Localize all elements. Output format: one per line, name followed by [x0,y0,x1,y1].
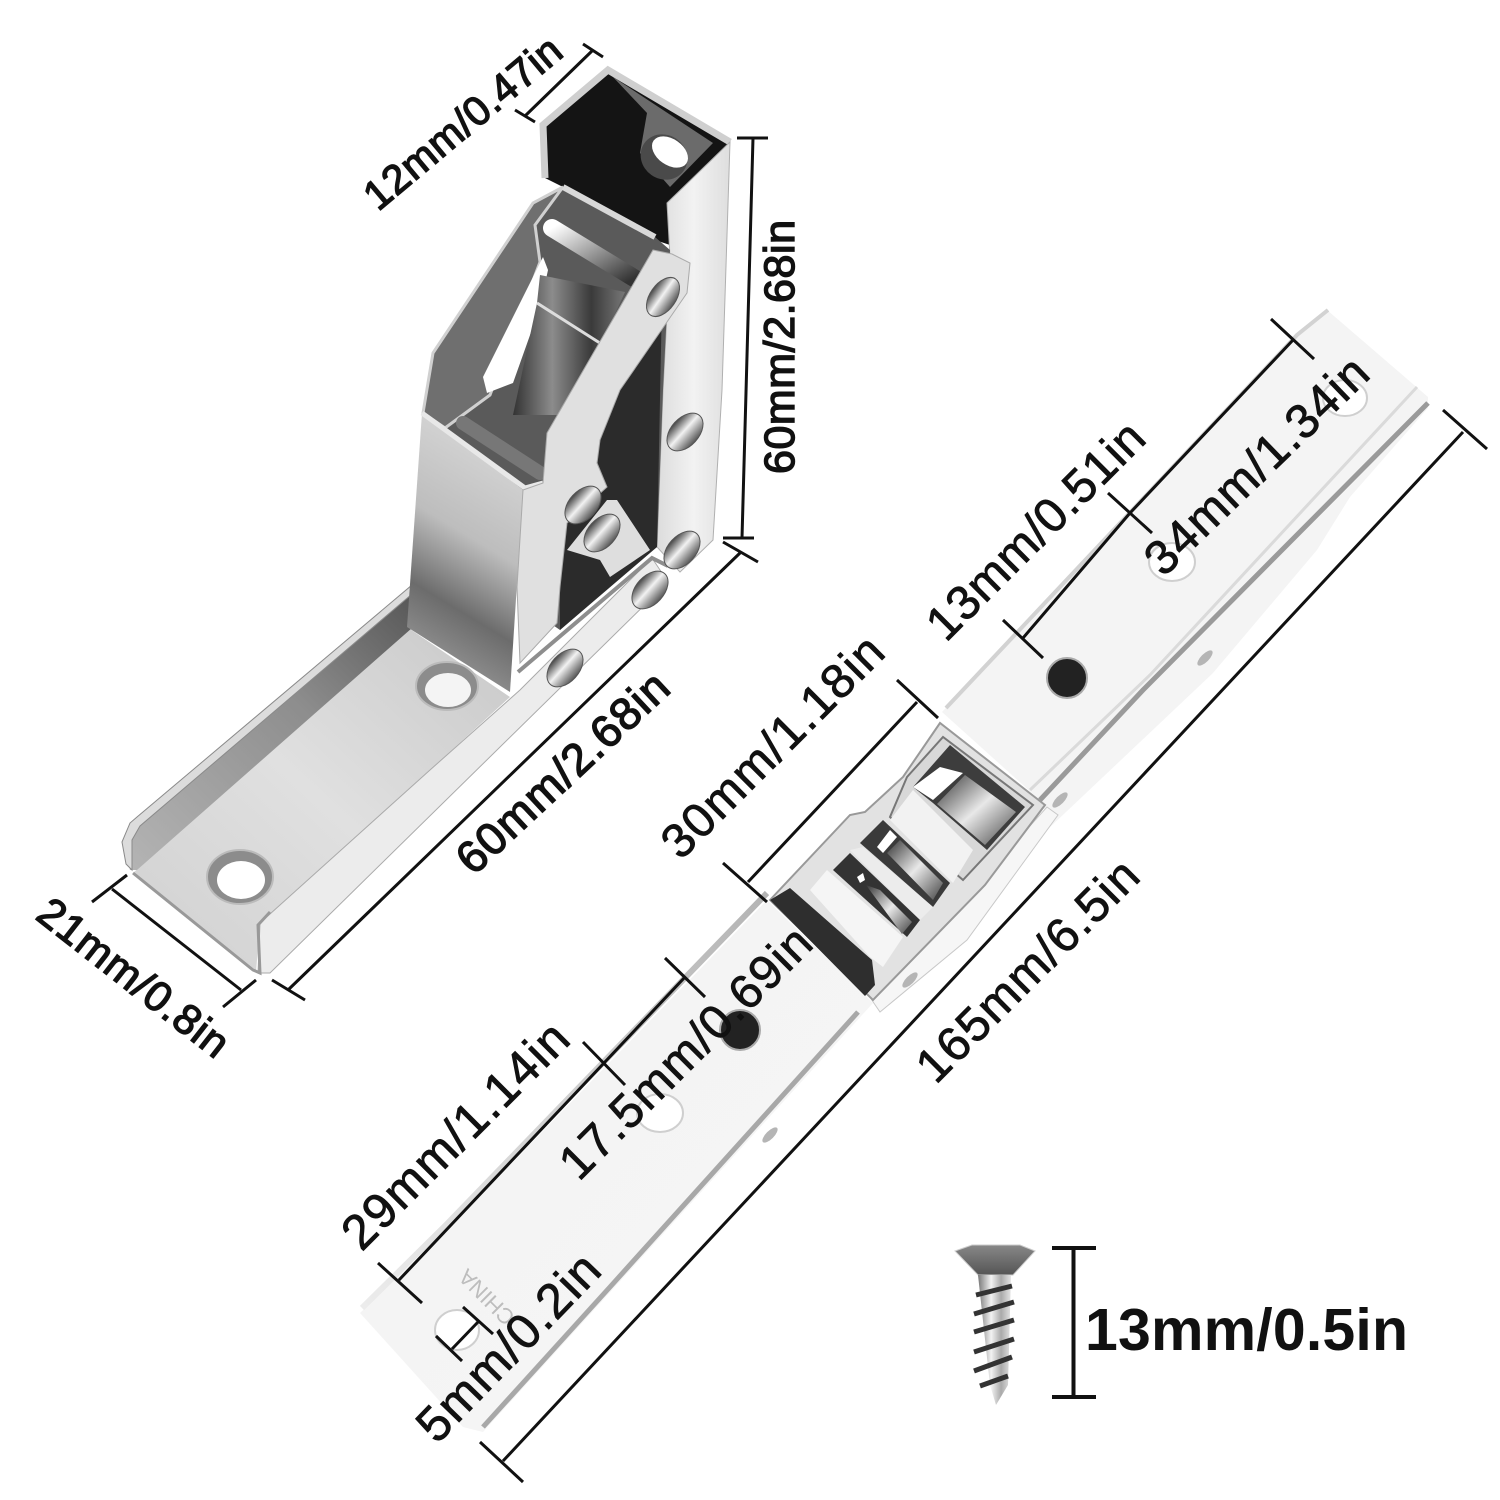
upper plate [942,310,1428,830]
middle window opening [877,830,897,853]
dimension: 60mm/2.68in vertical: 60mm/2.68in [756,220,804,474]
rivets [540,272,710,694]
dimension: 165mm/6.5in: 165mm/6.5in [906,849,1150,1093]
centre base [770,723,1045,1000]
dimension: 60mm/2.68in diagonal [272,542,758,1000]
lower dark channel [770,888,875,996]
dimension: 12mm/0.47in: 12mm/0.47in [354,27,571,219]
upper window opening [913,767,963,800]
white mounting holes [435,380,1367,1350]
lower roller [866,885,912,934]
gas strut cylinder [513,275,625,415]
countersunk black holes [720,658,1087,1050]
base end edge [133,873,270,973]
centre mechanism [770,723,1045,1000]
upright right panel [657,142,730,572]
dimension: 60mm/2.68in vertical [723,138,804,538]
mechanism interior [422,187,670,630]
centre light plate [890,790,973,883]
side flange [867,807,1058,1012]
lower light plate [810,870,903,967]
upper frame [890,737,1033,880]
lower pin [463,423,540,473]
dimension: 13mm/0.51in: 13mm/0.51in [916,411,1156,651]
straight hinge photo [360,310,1428,1432]
front rim [422,413,543,488]
screw head [955,1245,1035,1275]
dimension: 29mm/1.14in: 29mm/1.14in [331,1011,580,1260]
upper plate fold inner [1030,387,1417,790]
window arm [423,187,563,428]
dimension: 13mm/0.5in screw [1052,1248,1408,1397]
dimension: 60mm/2.68in diagonal: 60mm/2.68in [445,661,679,884]
upper plate top edge [946,310,1328,708]
link plate [567,500,650,577]
upper window [913,745,1025,850]
stamped CHINA mark: CHINA [453,1264,520,1330]
screw shank [978,1275,1011,1405]
window rim [563,187,655,237]
upper plate fold [1040,403,1428,800]
lower plate [360,900,873,1432]
upper bracket interior [543,68,730,245]
lower plate fold [483,1012,858,1427]
upper roller [937,775,1016,845]
lower window [833,853,920,937]
rear mounting hole [416,662,478,710]
upper pin [552,228,634,278]
base channel floor [133,627,510,972]
centre bar [850,847,933,920]
dimension: 13mm/0.5in screw: 13mm/0.5in [1085,1297,1408,1363]
dark mechanism recess [560,300,662,630]
folded hinge photo [122,68,730,973]
dimension: 21mm/0.8in: 21mm/0.8in [29,888,239,1067]
white slot [483,257,548,393]
middle window [860,820,950,907]
base front flange [258,558,668,973]
dimension: 30mm/1.18in: 30mm/1.18in [651,625,895,869]
screw photo [955,1245,1035,1405]
lower plate top edge shade [362,893,767,1308]
front arm [517,250,690,663]
dimension: 17.5mm/0.69in: 17.5mm/0.69in [549,916,823,1190]
upright left face [407,413,523,692]
middle roller [887,840,943,900]
lower window opening [857,873,865,883]
front mounting hole [207,850,273,904]
lower diagonal band [518,558,668,672]
base side wall [122,585,412,870]
dimension: 34mm/1.34in: 34mm/1.34in [1134,346,1380,586]
dimension: 5mm/0.2in: 5mm/0.2in [406,1243,612,1453]
screw threads [974,1286,1014,1386]
side slots [760,648,1215,1145]
